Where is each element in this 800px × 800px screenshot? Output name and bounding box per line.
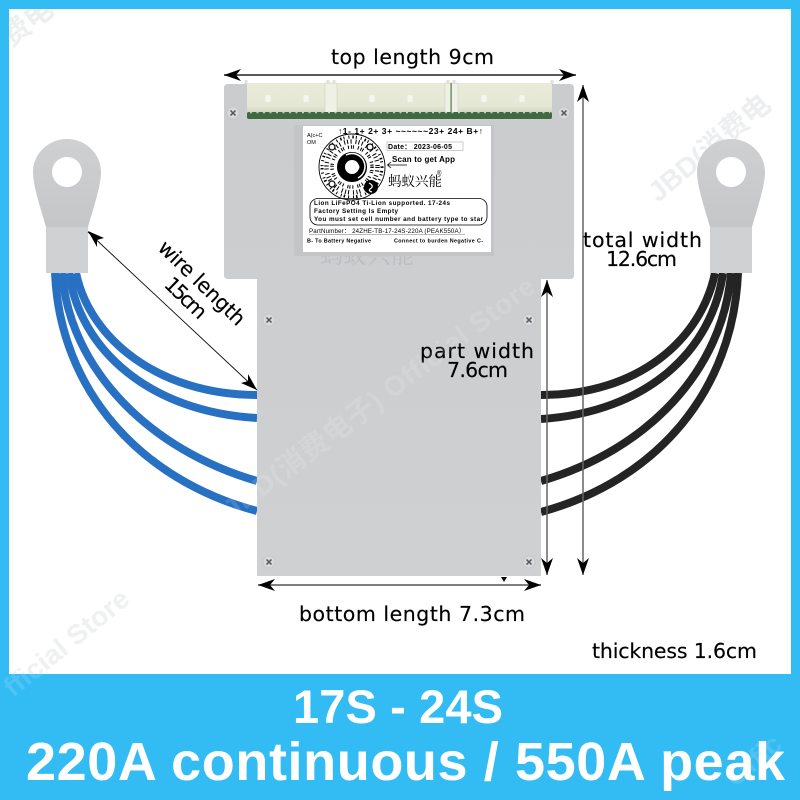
bottom length label: bottom length 7.3cm — [299, 602, 525, 626]
spec heading: cell count: 17S - 24S — [293, 680, 503, 733]
notice box: Factory Setting Is Empty — [314, 208, 398, 215]
wire length label: 15cm — [160, 272, 212, 324]
part width label: part width — [420, 339, 534, 363]
screw top left — [227, 107, 239, 119]
total width label: 12.6cm — [606, 247, 677, 271]
part width label — [420, 339, 534, 382]
watermark overlay — [0, 270, 788, 793]
total width label: total width — [583, 228, 702, 252]
thickness label: thickness 1.6cm — [592, 639, 757, 663]
arrow: bottom length — [258, 577, 541, 591]
screw middle right — [523, 314, 535, 326]
arrow: total width — [577, 85, 589, 575]
blue wires — [55, 273, 257, 511]
arrow: part width — [541, 280, 553, 575]
terminal row text: ↑1- 1+ 2+ 3+ ~~~~~~23+ 24+ B+↑ — [338, 126, 483, 136]
top length label: top length 9cm — [331, 45, 494, 69]
watermark on white area: fficial Store — [0, 583, 135, 703]
watermark overlay: JBD(消费电子) Official Store — [217, 270, 541, 525]
small corner text: A(c+C — [307, 133, 322, 139]
small corner text: OM — [307, 140, 316, 146]
ghost brand text below label: 蚂蚁兴能 — [320, 237, 414, 270]
part number: PartNumber： 24ZHE-TB-17-24S-220A (PEAK550A） — [309, 228, 465, 235]
screw top right — [558, 107, 570, 119]
connector strip — [246, 80, 552, 119]
date box — [387, 142, 463, 151]
screw middle left — [263, 314, 275, 326]
total width label — [583, 228, 702, 271]
scan text with arrow: Scan to get App — [392, 155, 455, 164]
arrow: top length — [224, 69, 576, 81]
product label — [294, 125, 494, 256]
QR code dial — [319, 134, 385, 200]
negative terminal note right: Connect to burden Negative C- — [394, 238, 483, 244]
arrow: wire length — [88, 231, 257, 390]
wire length label: wire length — [153, 235, 250, 330]
spec heading: current rating: 220A continuous / 550A peak — [26, 732, 786, 792]
notice box: You must set cell number and battery type to star — [314, 216, 484, 223]
part width label: 7.6cm — [447, 358, 508, 382]
right ring terminal — [697, 139, 765, 273]
date box: Date： 2023-06-05 — [388, 144, 452, 151]
black wires — [541, 273, 738, 512]
registered mark: ® — [437, 170, 442, 177]
negative terminal note left: B- To Battery Negative — [307, 238, 371, 244]
notice box: Lion LiFePO4 Ti-Lion supported. 17-24s — [314, 200, 450, 207]
watermark on white area: JBD(消费电 — [642, 88, 776, 208]
scan text with arrow — [388, 155, 455, 168]
brand name: 蚂蚁兴能 — [388, 170, 442, 190]
screw bottom left — [263, 556, 275, 568]
notice box — [310, 198, 487, 225]
screw bottom right — [523, 556, 535, 568]
BMS board — [224, 80, 574, 576]
watermark overlay: fficial Store — [0, 583, 135, 703]
left ring terminal — [33, 139, 101, 273]
watermark overlay: Offic — [719, 728, 788, 793]
